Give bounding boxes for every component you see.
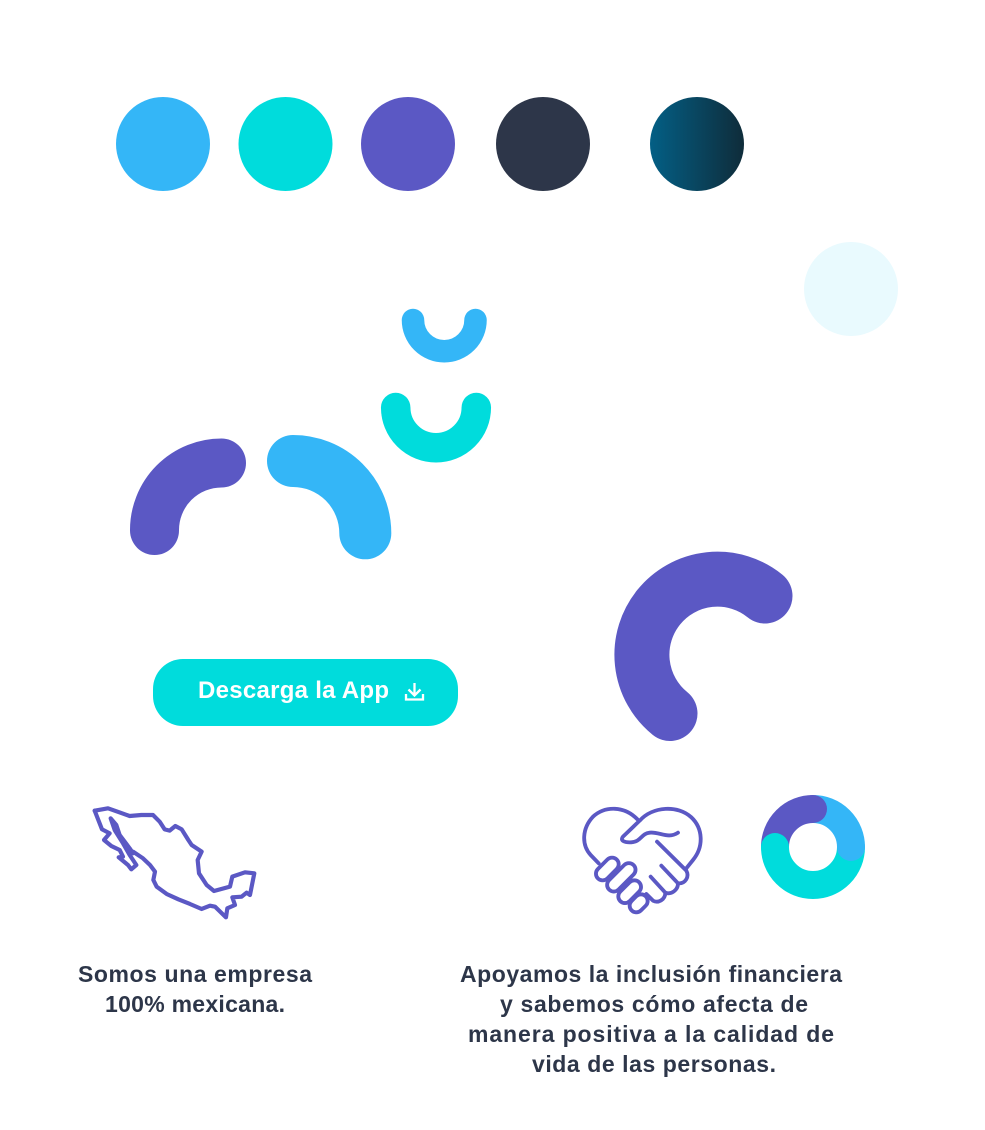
swatch: turquoise [238,97,332,191]
icon: handshake heart [584,809,701,915]
text: financial inclusion: y sabemos cómo afecta de [500,991,808,1017]
swatch: teal gradient [650,97,744,191]
text: financial inclusion: Apoyamos la inclusión financiera [460,961,842,987]
shape: blue quarter arc [293,461,365,533]
shape: large indigo open ring [642,579,765,714]
text: 100% Mexican company [78,961,312,1017]
swatch: indigo [361,97,455,191]
text: financial inclusion: manera positiva a la calidad de [468,1021,834,1047]
colour palette swatches [116,97,744,191]
shape: turquoise smile arc [396,408,476,448]
text: financial inclusion [460,961,842,1077]
icon: download [406,683,423,700]
text: 100% Mexican company: 100% mexicana. [105,991,285,1017]
icon: map of Mexico [95,808,254,917]
button background [153,659,458,726]
shape: small blue smile arc [413,320,476,351]
swatch: pale cyan circle [804,242,898,336]
text: 100% Mexican company: Somos una empresa [78,961,312,987]
button label: Descarga la App [198,677,389,704]
text: financial inclusion: vida de las personas. [532,1051,776,1077]
button: download the app [153,659,458,726]
swatch: dark navy [496,97,590,191]
shape: indigo quarter arc [154,463,222,530]
icon: tricolour donut [761,795,865,885]
swatch: sky blue [116,97,210,191]
